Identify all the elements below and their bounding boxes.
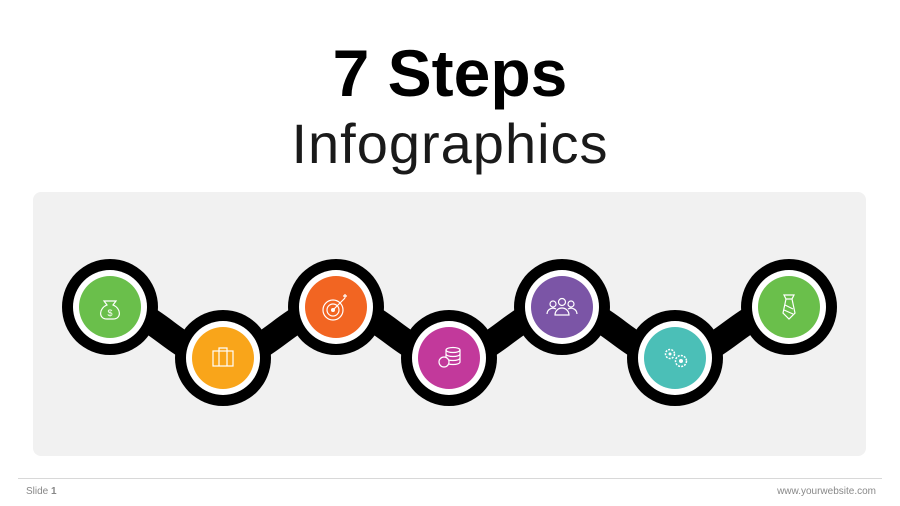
footer: website: www.yourwebsite.com bbox=[777, 486, 876, 497]
step 5 bbox=[514, 259, 610, 355]
connector path bbox=[110, 307, 789, 358]
title: 7 Steps bbox=[333, 36, 567, 110]
step 2 bbox=[175, 310, 271, 406]
step 4 bbox=[401, 310, 497, 406]
step 3 bbox=[288, 259, 384, 355]
step 1 bbox=[62, 259, 158, 355]
step 7 bbox=[741, 259, 837, 355]
step 6 bbox=[627, 310, 723, 406]
panel: steps bbox=[33, 192, 866, 456]
footer: slide number: Slide 1 bbox=[26, 486, 57, 497]
step 1: $ bbox=[107, 308, 113, 318]
subtitle: Infographics bbox=[291, 112, 609, 175]
footer divider bbox=[18, 478, 882, 479]
